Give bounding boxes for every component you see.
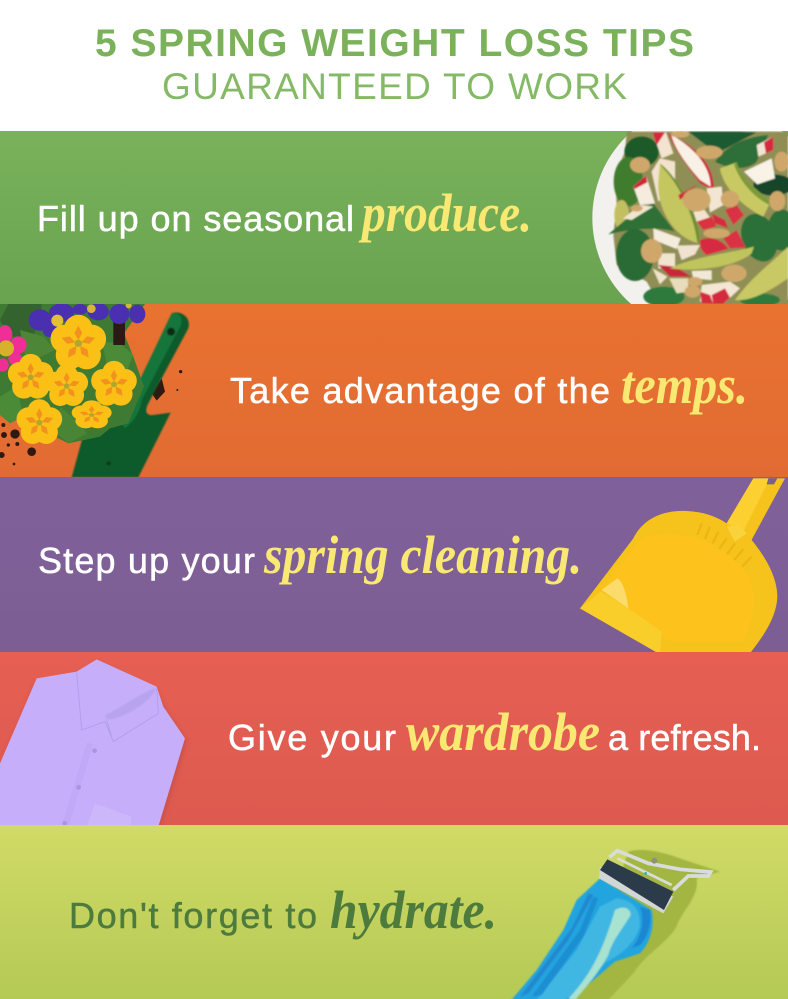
tip text 2 bbox=[230, 355, 748, 415]
panel: hydrate bbox=[0, 825, 788, 999]
tip text 3 bbox=[38, 525, 582, 585]
tip text 4 bbox=[228, 702, 761, 762]
panel: spring cleaning bbox=[0, 477, 788, 653]
tip text 5: hydrate. bbox=[330, 880, 497, 940]
purple flowers bbox=[29, 303, 145, 337]
leaves bbox=[0, 304, 145, 443]
yellow flowers bbox=[51, 315, 106, 369]
tip text 5 bbox=[69, 880, 497, 940]
tip text 4: a refresh. bbox=[608, 717, 761, 758]
tip text 4: wardrobe bbox=[406, 702, 600, 762]
heading line 2: GUARANTEED TO WORK bbox=[162, 66, 627, 107]
soil bbox=[0, 370, 182, 465]
panel: seasonal produce bbox=[0, 131, 788, 304]
tip text 2: temps. bbox=[621, 355, 748, 415]
tip text 1 bbox=[37, 183, 532, 243]
tip text 3: spring cleaning. bbox=[263, 525, 582, 585]
tip text 1: Fill up on seasonal bbox=[37, 198, 354, 239]
tip text 1: produce. bbox=[358, 183, 532, 243]
tip text 4: Give your bbox=[228, 717, 396, 758]
icon: flowers and trowel bbox=[0, 302, 189, 477]
panel: warmer temps bbox=[0, 302, 788, 477]
tip text 5: Don't forget to bbox=[69, 895, 317, 936]
icon: blue water bottle bbox=[510, 850, 720, 999]
icon: yellow dustpan bbox=[580, 478, 785, 653]
tip text 3: Step up your bbox=[38, 540, 255, 581]
tip text 2: Take advantage of the bbox=[230, 370, 610, 411]
icon: salad plate bbox=[592, 131, 788, 304]
title bbox=[95, 22, 694, 107]
trowel bbox=[72, 312, 189, 477]
pink flower bbox=[0, 325, 27, 372]
icon: lilac sleeveless shirt bbox=[0, 659, 187, 828]
heading line 1: 5 SPRING WEIGHT LOSS TIPS bbox=[95, 22, 694, 65]
panel: wardrobe refresh bbox=[0, 652, 788, 828]
